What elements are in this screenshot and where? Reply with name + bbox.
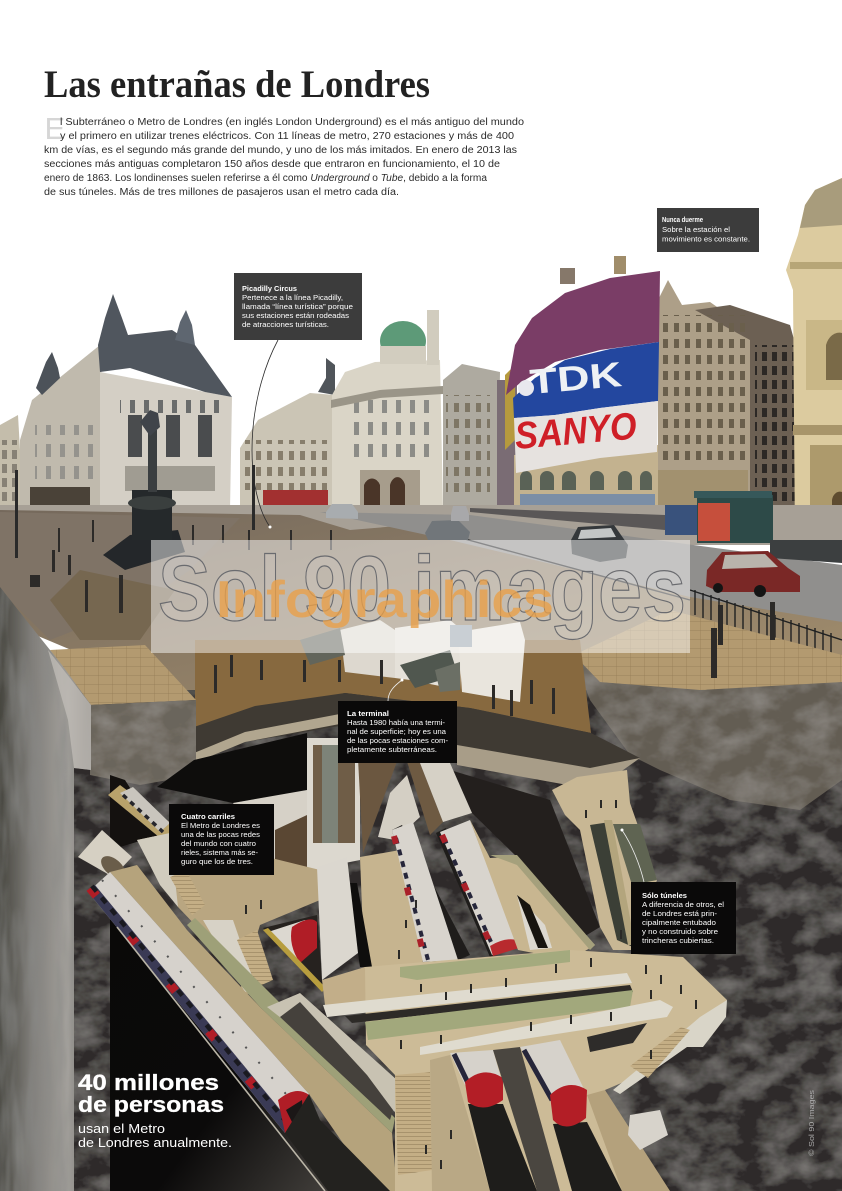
callout: Cuatro carriles: Cuatro carriles	[181, 812, 235, 821]
callout: Sólo túneles: de Londres está prin-	[642, 909, 718, 918]
callout: Sólo túneles: trincheras cubiertas.	[642, 936, 714, 945]
intro text block: l Subterráneo o Metro de Londres (en inglés London Underground) es el más antiguo del mundo	[60, 117, 524, 128]
callout: La terminal: La terminal	[347, 709, 389, 718]
upper-left train	[108, 785, 180, 842]
callout: Cuatro carriles: una de las pocas redes	[181, 830, 260, 839]
black taxi	[571, 525, 628, 562]
callout: Picadilly Circus: llamada “línea turística” porque	[242, 302, 353, 311]
callout: Picadilly Circus: de atracciones turísticas.	[242, 320, 329, 329]
intro text block: E	[44, 111, 65, 146]
lower green wall	[365, 990, 633, 1040]
callout: Picadilly Circus: Pertenece a la línea Picadilly,	[242, 293, 343, 302]
credit: © Sol 90 Images	[808, 1089, 816, 1156]
right paved block	[574, 610, 842, 690]
long train track bed	[285, 1094, 390, 1191]
left corner building	[20, 294, 232, 510]
callout: Picadilly Circus: sus estaciones están rodeadas	[242, 311, 349, 320]
callout: Cuatro carriles: guro que los de tres.	[181, 857, 253, 866]
callout: Nunca duerme: Nunca duerme	[662, 215, 703, 224]
big stat: 40 millones	[78, 1070, 232, 1150]
right platform lower	[587, 1090, 670, 1191]
beam one	[323, 973, 632, 1017]
white wedge wall	[317, 857, 358, 980]
right rock cliff	[572, 652, 842, 810]
intro text block	[44, 111, 524, 198]
left stair	[395, 1072, 432, 1175]
platform beside upper central train	[360, 850, 425, 985]
train A with track	[392, 822, 470, 965]
silver car	[425, 520, 470, 540]
surface pedestrians	[30, 520, 775, 716]
central curved building	[240, 310, 443, 512]
walkway beside train B	[470, 820, 595, 960]
lower left platform and edge	[430, 1055, 490, 1191]
concourse underside	[194, 693, 640, 790]
callout: Sólo túneles: A diferencia de otros, el	[642, 900, 724, 909]
long platform strip	[110, 865, 397, 1191]
intro text block: secciones más antiguas completaron 150 años desde que entraron en funcionamiento, el 10 de	[44, 159, 500, 170]
train C and track	[450, 1050, 537, 1191]
callout: Cuatro carriles: rieles, sistema más se-	[181, 848, 259, 857]
callout: Nunca duerme: Sobre la estación el	[662, 225, 730, 234]
right tan buildings	[560, 256, 803, 515]
intro text block: de sus túneles. Más de tres millones de pasajeros usan el metro cada día.	[44, 187, 399, 198]
callout: Sólo túneles: y no construido sobre	[642, 927, 718, 936]
callout: Cuatro carriles: del mundo con cuatro	[181, 839, 256, 848]
rock mass background	[0, 690, 842, 1191]
street scene: buildings	[0, 178, 842, 542]
upper green wall	[400, 950, 570, 980]
callout: La terminal: pletamente subterráneas.	[347, 745, 437, 754]
billboard and arcade building: TDK	[528, 355, 623, 402]
left paved block	[50, 645, 196, 785]
callout: Cuatro carriles: El Metro de Londres es	[181, 821, 260, 830]
gap under beam one	[345, 985, 633, 1023]
white service tube	[233, 790, 307, 873]
concourse floor	[195, 620, 591, 733]
black void and interior rock	[110, 733, 600, 1191]
connecting bridge and stairs	[137, 833, 320, 1005]
big stat: 40 millones: de Londres anualmente.	[78, 1135, 232, 1150]
central lift shaft	[307, 738, 405, 885]
callout: Sólo túneles: cipalmente entubado	[642, 918, 716, 927]
intro text block: y el primero en utilizar trenes eléctricos. Con 11 líneas de metro, 270 estaciones y más de 400	[60, 131, 514, 142]
tiled tunnel wall	[187, 918, 395, 1133]
billboard and arcade building	[497, 271, 660, 520]
train B with track	[436, 820, 519, 957]
callout: Picadilly Circus	[234, 273, 362, 528]
callout: Nunca duerme: movimiento es constante.	[662, 234, 750, 244]
rock frame	[267, 993, 397, 1112]
billboard and arcade building: SANYO	[513, 405, 638, 458]
Eros fountain	[103, 410, 185, 570]
callout: Cuatro carriles	[169, 804, 274, 875]
callout: La terminal	[338, 678, 457, 763]
right outer wall	[613, 1000, 727, 1094]
main concourse floor	[365, 950, 727, 1191]
left rock pillar	[0, 587, 91, 1191]
rock wedge between tracks	[493, 1047, 560, 1191]
passengers	[245, 800, 697, 1169]
long train	[88, 872, 309, 1133]
big stat: 40 millones: de personas	[78, 1092, 224, 1117]
subway stations	[78, 738, 727, 1191]
running tunnels	[78, 755, 472, 882]
callout: Nunca duerme	[657, 208, 759, 252]
big stat: 40 millones: usan el Metro	[78, 1121, 165, 1136]
upper-left train front	[263, 915, 326, 992]
white plant room	[628, 1110, 668, 1150]
ticket halls	[300, 620, 525, 702]
big stat: 40 millones: 40 millones	[78, 1070, 219, 1095]
exposed rock	[280, 1002, 393, 1120]
watermark: Sol 90 images	[158, 538, 686, 640]
train D and track	[520, 1040, 622, 1191]
pit beside wedge	[348, 883, 372, 967]
title: Las entrañas de Londres	[44, 63, 430, 106]
beam two	[420, 1000, 673, 1055]
watermark: Infographics	[216, 571, 554, 629]
callout: Sólo túneles: Sólo túneles	[642, 891, 687, 900]
floor under wedge	[322, 967, 420, 1005]
callout: La terminal: de las pocas estaciones com-	[347, 736, 449, 745]
callout: La terminal: Hasta 1980 había una termi-	[347, 718, 446, 727]
far-right domed building	[786, 178, 842, 542]
callout: Picadilly Circus: Picadilly Circus	[242, 284, 297, 293]
far-left building	[0, 415, 24, 520]
street furniture: fence, kiosk, cars, lamp posts	[15, 465, 842, 657]
callout: Sólo túneles	[620, 828, 736, 954]
red car	[706, 551, 800, 597]
intro text block: enero de 1863. Los londinenses suelen referirse a él como Underground o Tube, debido a la forma	[44, 173, 487, 184]
grey far buildings	[443, 364, 500, 512]
intro text block: km de vías, es el segundo más grande del mundo, y uno de los más imitados. En enero de 2013 las	[44, 145, 517, 156]
street surface and pavement	[0, 505, 842, 700]
right pit	[587, 1023, 647, 1052]
escalator hall	[552, 770, 657, 950]
right stair	[630, 1027, 690, 1078]
callout: La terminal: nal de superficie; hoy es una	[347, 727, 447, 736]
rail beneath long train	[117, 927, 325, 1191]
